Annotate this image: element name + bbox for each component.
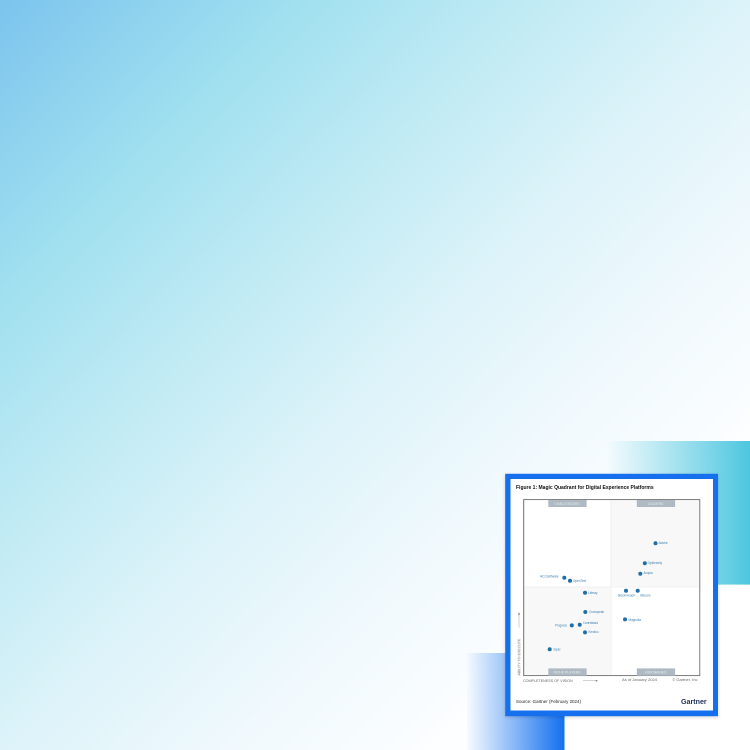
vendor labels: OpenText — [573, 579, 586, 583]
quadrant label: challengers — [548, 500, 587, 507]
quadrant chart — [524, 500, 700, 676]
vendor labels: Kentico — [588, 630, 599, 634]
vendor labels: HCLSoftware — [540, 575, 559, 579]
vendor labels — [540, 541, 668, 652]
vendor labels: Squiz — [554, 648, 561, 652]
y axis label: ability to execute — [517, 612, 521, 676]
gartner logo: Gartner — [681, 697, 707, 706]
vendor labels: Magnolia — [628, 618, 641, 622]
vendor points — [548, 541, 658, 651]
vendor labels: Bloomreach — [618, 593, 635, 597]
vendor labels: Crownpeak — [589, 610, 604, 614]
magic quadrant card — [505, 474, 718, 716]
vendor labels: Sitecore — [640, 593, 651, 597]
x axis label: completeness of vision — [523, 679, 598, 683]
quadrant label: leaders: LEADERS — [648, 502, 664, 506]
quadrant label: visionaries: VISIONARIES — [645, 671, 667, 675]
vendor labels: Contentstack — [583, 621, 598, 625]
source line: Source: Gartner (February 2024) — [516, 699, 581, 704]
vendor labels: Optimizely — [648, 561, 662, 565]
quadrant label: niche players: NICHE PLAYERS — [554, 671, 581, 675]
vendor labels: Progress — [555, 624, 567, 628]
quadrant label: leaders — [637, 500, 675, 507]
vendor labels: Acquia — [644, 571, 653, 575]
y axis label: ability to execute: ABILITY TO EXECUTE — [517, 638, 521, 676]
quadrant label: challengers: CHALLENGERS — [554, 502, 580, 506]
vendor labels: Adobe — [659, 541, 668, 545]
blue gradient block — [467, 653, 564, 750]
teal gradient block — [606, 441, 750, 585]
quadrant label: visionaries — [637, 668, 675, 676]
white lower-right panel — [564, 585, 750, 750]
figure title: Figure 1: Magic Quadrant for Digital Experience Platforms — [516, 485, 654, 491]
copyright note: © Gartner, Inc — [672, 678, 698, 682]
quadrant label: niche players — [548, 668, 587, 676]
vendor labels: Liferay — [588, 591, 598, 595]
x axis label: completeness of vision: COMPLETENESS OF VISION — [523, 679, 573, 683]
date note: As of January 2024 — [622, 678, 657, 682]
